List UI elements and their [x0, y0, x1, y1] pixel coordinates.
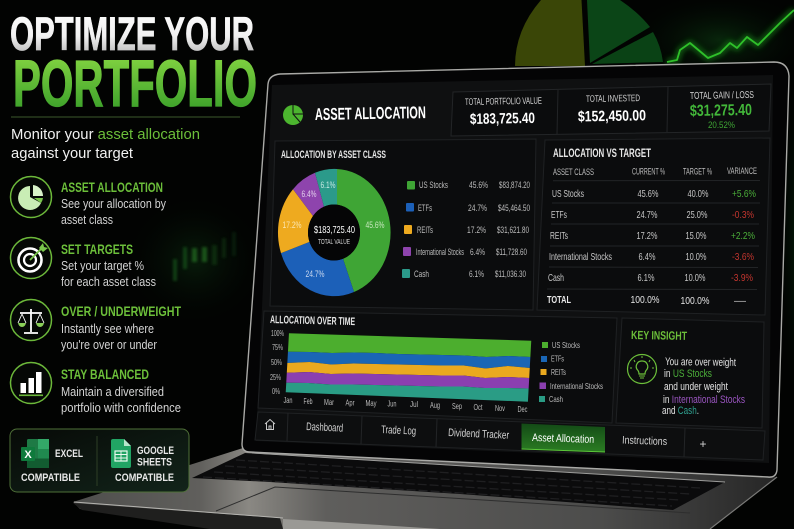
subtitle — [11, 116, 240, 162]
table rows: 10.0% — [684, 272, 706, 284]
chart legend: Cash — [549, 394, 563, 404]
legend table: $83,874.20 — [499, 180, 530, 191]
legend table: 17.2% — [467, 225, 486, 236]
dashboard header: ASSET ALLOCATION — [315, 103, 426, 124]
legend table: 6.4% — [470, 247, 485, 258]
icon: excel — [21, 439, 49, 468]
insight text: in International Stocks — [663, 394, 745, 406]
icon: header pie — [283, 105, 303, 125]
compatibility badge: SHEETS — [137, 456, 172, 468]
table header: TARGET % — [683, 166, 712, 178]
panel: allocation vs target: ALLOCATION VS TARGET — [553, 148, 651, 160]
icon: pie — [10, 176, 52, 218]
tab bar: + — [699, 437, 707, 451]
background line chart — [667, 10, 794, 62]
donut chart: 6.4% — [302, 189, 317, 200]
insight text: and under weight — [664, 381, 728, 393]
kpi strip: TOTAL GAIN / LOSS — [690, 90, 754, 102]
feature: over / underweight: Instantly see where — [61, 321, 154, 336]
y axis labels: 75% — [272, 342, 283, 352]
feature: over / underweight: OVER / UNDERWEIGHT — [61, 303, 181, 319]
table rows: REITs — [550, 230, 568, 242]
tab bar: Dashboard — [306, 421, 343, 435]
subtitle: Monitor your asset allocation — [11, 126, 200, 143]
y axis labels: 0% — [272, 386, 280, 396]
table rows: 17.2% — [636, 230, 658, 242]
laptop base — [73, 448, 777, 529]
chart legend: US Stocks — [552, 340, 580, 350]
x axis labels: Apr — [346, 398, 355, 408]
compatibility badge: EXCEL — [55, 448, 83, 460]
chart legend — [539, 340, 603, 404]
feature: set targets — [10, 238, 156, 289]
donut chart: 45.6% — [366, 220, 385, 231]
chart legend: REITs — [551, 367, 566, 377]
donut chart: 17.2% — [282, 220, 302, 231]
panel: allocation by asset class: ALLOCATION BY ASSET CLASS — [281, 149, 386, 161]
title — [10, 7, 257, 120]
table rows — [547, 188, 756, 307]
icon: home — [265, 420, 275, 430]
feature: asset allocation — [10, 176, 166, 227]
legend table: ETFs — [418, 203, 432, 214]
x axis labels: Jun — [388, 398, 397, 408]
tab bar — [255, 412, 765, 460]
table rows: TOTAL — [547, 294, 571, 306]
x axis labels: Dec — [518, 404, 528, 414]
x axis labels: Mar — [324, 397, 334, 407]
table rows: — — [734, 295, 747, 307]
subtitle: against your target — [11, 145, 134, 162]
feature: over / underweight — [10, 300, 181, 352]
legend table: Cash — [414, 269, 429, 280]
active tab: Asset Allocation — [532, 432, 594, 446]
table rows: -3.9% — [731, 272, 753, 284]
legend table: $31,621.80 — [497, 225, 529, 236]
y axis labels: 25% — [270, 372, 281, 382]
legend table: International Stocks — [416, 247, 464, 258]
feature: set targets: SET TARGETS — [61, 241, 133, 257]
title: PORTFOLIO — [13, 46, 257, 120]
icon: target — [10, 238, 52, 278]
kpi strip: 20.52% — [708, 120, 735, 131]
feature: stay balanced — [10, 362, 181, 415]
panel: allocation over time — [258, 311, 617, 423]
table header: ASSET CLASS — [553, 167, 594, 178]
icon: light bulb — [628, 354, 656, 384]
legend table: $11,036.30 — [495, 269, 526, 280]
table rows: International Stocks — [549, 251, 612, 263]
y axis labels: 50% — [271, 357, 282, 367]
table rows: 45.6% — [638, 188, 658, 200]
icon: google sheets — [111, 439, 131, 468]
y axis labels: 100% — [271, 328, 284, 338]
kpi strip: $183,725.40 — [470, 110, 535, 128]
x axis labels: May — [366, 398, 377, 408]
table rows: 10.0% — [686, 251, 706, 263]
table rows: -0.3% — [732, 209, 754, 221]
compatibility badge: GOOGLE — [137, 445, 174, 457]
active tab — [522, 424, 605, 452]
laptop screen — [242, 62, 789, 477]
legend table: 24.7% — [468, 203, 487, 214]
kpi strip: TOTAL INVESTED — [586, 93, 640, 105]
table rows: ETFs — [551, 209, 567, 221]
table rows: +5.6% — [732, 188, 756, 200]
insight text: in US Stocks — [664, 368, 712, 380]
feature: asset allocation: ASSET ALLOCATION — [61, 179, 163, 195]
insight text: and Cash. — [662, 405, 699, 417]
tab bar: Trade Log — [381, 424, 416, 438]
panel: allocation by asset class — [270, 139, 536, 310]
x axis labels — [284, 395, 528, 414]
legend table: US Stocks — [419, 180, 448, 191]
x axis labels: Jul — [410, 399, 418, 409]
panel: key insight: KEY INSIGHT — [631, 328, 688, 343]
kpi strip: TOTAL PORTFOLIO VALUE — [465, 96, 542, 108]
title: OPTIMIZE YOUR — [10, 7, 254, 60]
panel: key insight — [616, 318, 764, 428]
icon: bars — [10, 362, 52, 404]
chart legend: ETFs — [551, 354, 564, 364]
legend table — [402, 180, 530, 280]
x axis labels: Nov — [495, 403, 505, 413]
feature: stay balanced: STAY BALANCED — [61, 366, 149, 382]
x axis labels: Oct — [474, 402, 483, 412]
compatibility badge — [10, 429, 189, 492]
feature: set targets: Set your target % — [61, 258, 144, 273]
donut chart: $183,725.40 — [314, 224, 355, 236]
kpi strip — [451, 84, 771, 136]
donut chart — [278, 169, 391, 296]
kpi strip: $31,275.40 — [690, 102, 752, 120]
table rows: +2.2% — [731, 230, 755, 242]
donut chart: TOTAL VALUE — [318, 239, 350, 246]
kpi strip: $152,450.00 — [578, 107, 646, 125]
donut chart: 6.1% — [320, 180, 336, 191]
x axis labels: Sep — [452, 401, 462, 411]
legend table: REITs — [417, 225, 433, 236]
feature: asset allocation: asset class — [61, 212, 113, 227]
feature: stay balanced: Maintain a diversified — [61, 384, 164, 399]
feature: asset allocation: See your allocation by — [61, 196, 166, 211]
insight text: You are over weight — [665, 356, 736, 369]
table header — [553, 166, 757, 178]
donut chart: 24.7% — [306, 269, 325, 280]
feature: set targets: for each asset class — [61, 274, 156, 289]
feature: over / underweight: you're over or under — [61, 337, 158, 352]
compatibility badge: COMPATIBLE — [21, 472, 80, 484]
legend table: $11,728.60 — [496, 247, 527, 258]
table header: CURRENT % — [632, 166, 665, 178]
table rows: 24.7% — [636, 209, 658, 221]
table rows: 6.1% — [638, 272, 654, 284]
dashboard header — [283, 103, 426, 125]
x axis labels: Feb — [304, 396, 313, 406]
table rows: US Stocks — [552, 188, 584, 200]
x axis labels: Aug — [430, 400, 440, 410]
table header: VARIANCE — [727, 166, 757, 177]
table rows: 100.0% — [630, 294, 660, 306]
table rows: 6.4% — [638, 251, 656, 263]
table rows: 25.0% — [686, 209, 708, 221]
background candlestick bars — [173, 232, 236, 281]
tab bar: Instructions — [622, 435, 668, 448]
panel: allocation vs target — [537, 138, 770, 315]
laptop keyboard — [192, 453, 725, 510]
tab bar: Dividend Tracker — [448, 427, 510, 442]
table rows: Cash — [548, 272, 564, 284]
compatibility badge: COMPATIBLE — [115, 472, 174, 484]
background pie chart — [515, 0, 663, 66]
table rows: 100.0% — [680, 295, 710, 307]
icon: excel: X — [24, 449, 32, 461]
insight text — [662, 356, 745, 417]
x axis labels: Jan — [284, 395, 293, 405]
stacked area chart — [285, 333, 532, 402]
legend table: $45,464.50 — [498, 203, 530, 214]
chart legend: International Stocks — [550, 381, 603, 391]
table rows: 40.0% — [688, 188, 708, 200]
legend table: 6.1% — [469, 269, 484, 280]
icon: scales — [10, 300, 52, 340]
feature: stay balanced: portfolio with confidence — [61, 400, 181, 415]
table rows: 15.0% — [686, 230, 706, 242]
legend table: 45.6% — [469, 180, 488, 191]
panel: allocation over time: ALLOCATION OVER TIME — [270, 314, 355, 328]
table rows: -3.6% — [732, 251, 754, 263]
y axis labels — [270, 328, 284, 396]
